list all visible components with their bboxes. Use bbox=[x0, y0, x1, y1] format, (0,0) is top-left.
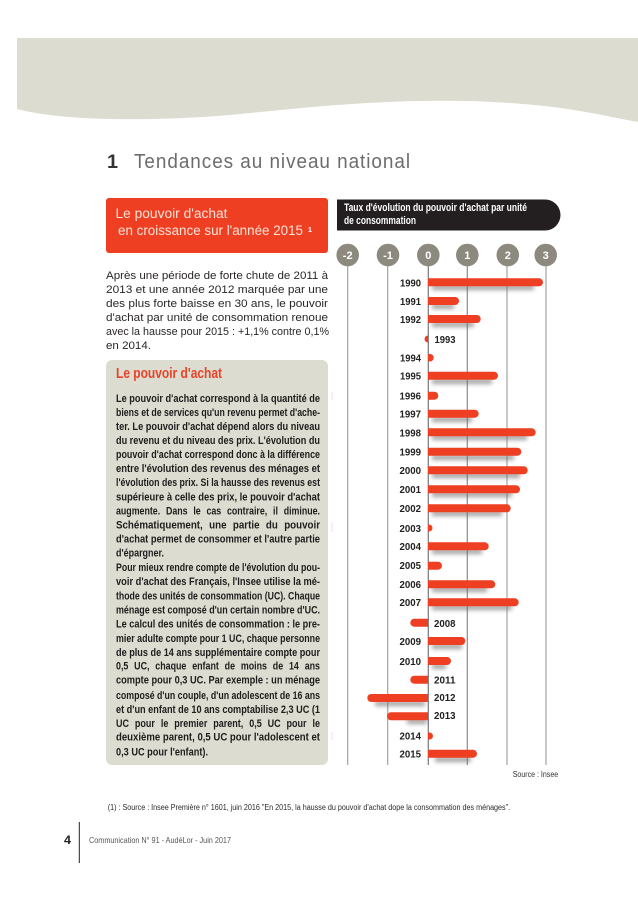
panel body text: et d'un enfant de 10 ans comptabilise 2,3 UC (1 bbox=[116, 704, 320, 716]
year labels: 2014 bbox=[400, 732, 421, 742]
intro text: en 2014. bbox=[106, 340, 151, 352]
bar chart bbox=[332, 244, 557, 765]
year labels: 1990 bbox=[400, 278, 421, 290]
top banner bbox=[17, 38, 638, 122]
intro text bbox=[106, 270, 329, 352]
year labels: 1998 bbox=[400, 428, 421, 440]
year labels: 1993 bbox=[434, 335, 456, 346]
intro text: d'achat par unité de consommation renoue bbox=[106, 312, 328, 324]
year labels: 1997 bbox=[400, 410, 421, 420]
panel body text: d'achat permet de consommer et l'autre partie bbox=[116, 534, 320, 546]
panel body text: UC pour le premier parent, 0,5 UC pour le bbox=[116, 718, 320, 730]
panel body text: ménage est composé d'un certain nombre d'UC. bbox=[116, 604, 320, 616]
footnote: (1) : Source : Insee Première n° 1601, juin 2016 "En 2015, la hausse du pouvoir d'achat dope la consommation des ménages". bbox=[108, 803, 510, 812]
chart title pill: Taux d'évolution du pouvoir d'achat par unité bbox=[344, 202, 527, 214]
panel body text: thode des unités de consommation (UC). Chaque bbox=[116, 590, 320, 602]
year labels: 2003 bbox=[400, 524, 421, 535]
red bars bbox=[367, 278, 543, 758]
panel body text: compte pour 0,3 UC. Par exemple : un ménage bbox=[116, 674, 320, 686]
axis bubbles: 3 bbox=[543, 250, 549, 262]
axis bubbles: -2 bbox=[343, 250, 353, 262]
panel body text: deuxième parent, 0,5 UC pour l'adolescent et bbox=[116, 732, 320, 744]
panel body text: l'évolution des prix. Si la hausse des revenus est bbox=[116, 477, 320, 489]
year labels: 2011 bbox=[434, 676, 456, 686]
year labels: 1992 bbox=[400, 315, 421, 326]
panel body text: entre l'évolution des revenus des ménages et bbox=[116, 463, 320, 475]
panel body text: Pour mieux rendre compte de l'évolution du pou- bbox=[116, 562, 320, 574]
intro text: 2013 et une année 2012 marquée par une bbox=[106, 284, 328, 296]
intro text: Après une période de forte chute de 2011 à bbox=[106, 270, 329, 282]
year labels: 2000 bbox=[400, 466, 421, 477]
definition panel bbox=[106, 360, 328, 765]
year labels: 1996 bbox=[400, 392, 421, 402]
year labels: 2009 bbox=[400, 637, 421, 648]
panel body text: Le pouvoir d'achat correspond à la quantité de bbox=[116, 393, 320, 405]
axis bubbles: 0 bbox=[425, 250, 431, 262]
axis bubbles bbox=[336, 244, 557, 266]
year labels: 2015 bbox=[400, 750, 421, 760]
red heading panel: en croissance sur l'année 2015 bbox=[118, 223, 303, 238]
panel body text: augmente. Dans le cas contraire, il diminue. bbox=[116, 506, 320, 518]
year labels: 2006 bbox=[400, 580, 421, 591]
panel body text: Schématiquement, une partie du pouvoir bbox=[116, 520, 320, 532]
year labels: 1991 bbox=[400, 297, 421, 308]
panel body text: 0,3 UC pour l'enfant). bbox=[116, 746, 208, 758]
panel body text: de plus de 14 ans supplémentaire compte pour bbox=[116, 647, 320, 659]
axis bubbles: 2 bbox=[505, 250, 511, 262]
footer rule bbox=[78, 822, 80, 863]
panel body text: ter. Le pouvoir d'achat dépend alors du niveau bbox=[116, 421, 320, 433]
year labels: 1999 bbox=[400, 448, 421, 458]
panel body text bbox=[116, 393, 320, 758]
year labels: 1994 bbox=[400, 354, 421, 364]
red heading panel bbox=[106, 198, 328, 253]
axis bubbles: 1 bbox=[464, 250, 470, 262]
red heading panel: 1 bbox=[308, 227, 312, 234]
year labels: 2012 bbox=[434, 693, 456, 704]
year labels: 2002 bbox=[400, 504, 421, 515]
footer text: Communication N° 91 - AudéLor - Juin 2017 bbox=[89, 836, 231, 845]
axis bubbles: -1 bbox=[383, 250, 393, 262]
intro text: des plus forte baisse en 30 ans, le pouvoir bbox=[106, 298, 328, 310]
year labels: 2013 bbox=[434, 711, 456, 722]
panel heading: Le pouvoir d'achat bbox=[116, 366, 222, 382]
panel body text: d'épargner. bbox=[116, 548, 164, 560]
page number: 4 bbox=[64, 835, 72, 847]
red heading panel: Le pouvoir d'achat bbox=[116, 206, 228, 221]
panel body text: biens et de services qu'un revenu permet d'ache- bbox=[116, 407, 320, 419]
panel body text: du revenu et du niveau des prix. L'évolution du bbox=[116, 435, 320, 447]
section title: Tendances au niveau national bbox=[134, 151, 411, 173]
intro text: avec la hausse pour 2015 : +1,1% contre 0,1% bbox=[106, 326, 329, 338]
chart title pill bbox=[337, 200, 560, 230]
year labels: 1995 bbox=[400, 372, 421, 382]
panel body text: composé d'un couple, d'un adolescent de 16 ans bbox=[116, 690, 320, 702]
chart source: Source : Insee bbox=[513, 770, 558, 779]
section title: 1 bbox=[107, 152, 118, 173]
panel body text: mier adulte compte pour 1 UC, chaque personne bbox=[116, 633, 320, 645]
panel body text: Le calcul des unités de consommation : le pre- bbox=[116, 618, 320, 630]
year labels bbox=[400, 278, 456, 760]
panel body text: 0,5 UC, chaque enfant de moins de 14 ans bbox=[116, 660, 320, 672]
panel body text: voir d'achat des Français, l'Insee utilise la mé- bbox=[116, 576, 320, 588]
year labels: 2005 bbox=[400, 561, 421, 572]
chart title pill: de consommation bbox=[344, 215, 416, 227]
year labels: 2001 bbox=[400, 485, 421, 496]
year labels: 2008 bbox=[434, 619, 456, 630]
year labels: 2004 bbox=[400, 542, 421, 553]
panel body text: supérieure à celle des prix, le pouvoir d'achat bbox=[116, 492, 320, 504]
year labels: 2007 bbox=[400, 598, 421, 609]
year labels: 2010 bbox=[400, 657, 421, 668]
panel body text: pouvoir d'achat correspond donc à la différence bbox=[116, 449, 320, 461]
